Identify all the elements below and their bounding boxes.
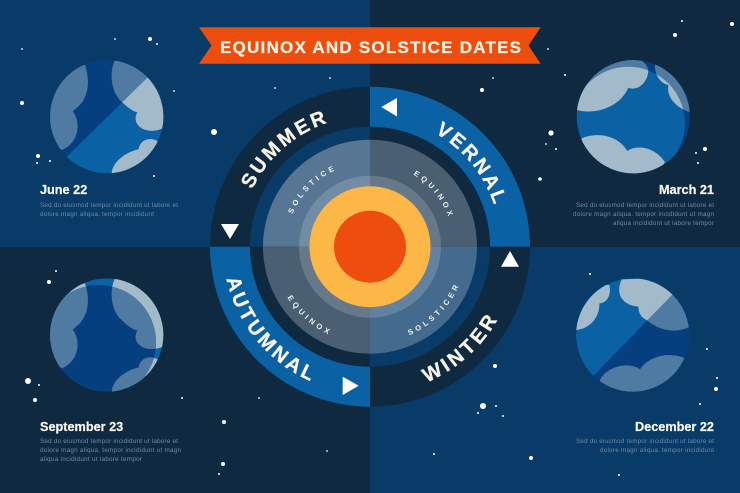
middle ring [250, 127, 490, 367]
gray inner disc [263, 140, 477, 354]
arrow: summer [221, 224, 239, 239]
label: equinox lower: EQUINOX [288, 295, 330, 334]
text block: June 22 [40, 183, 178, 218]
outer ring: winter quadrant [370, 247, 530, 407]
text block: September 23: aliqua incididunt ut labore tempor [40, 456, 142, 463]
outer ring: vernal quadrant [370, 87, 530, 247]
sun core [334, 211, 406, 283]
outer ring: autumnal quadrant [210, 247, 370, 407]
text block: September 23: September 23 [40, 420, 123, 434]
text block: March 21: March 21 [659, 183, 714, 197]
planet: December [576, 278, 690, 392]
label: autumnal: AUTUMNAL [226, 279, 311, 381]
arrow: winter [501, 251, 519, 267]
text block: June 22: Sed do eiusmod tempor incididunt ut labore et [40, 202, 178, 209]
text block: September 23: Sed do eiusmod tempor incididunt ut labore et [40, 438, 178, 445]
label: solsticer: SOLSTICER [408, 285, 458, 335]
sun outer [310, 186, 430, 307]
planet: June [50, 60, 164, 174]
planet: March [576, 60, 690, 174]
arrow: vernal [381, 98, 397, 116]
text block: March 21: Sed do eiusmod tempor incididunt ut labore et [576, 202, 714, 209]
text block: March 21 [573, 183, 714, 227]
label: winter: WINTER [420, 315, 498, 382]
text block: September 23: dolore magn aliqua. tempor incididunt ut magn [40, 447, 181, 454]
title: EQUINOX AND SOLSTICE DATES [220, 38, 521, 57]
arrow: autumnal [343, 377, 359, 395]
text block: December 22: Sed do eiusmod tempor incididunt ut labore et [576, 438, 714, 445]
text block: March 21: dolore magn aliqua. tempor incididunt ut magn [573, 211, 714, 218]
text block: March 21: aliqua incididunt ut labore tempor [613, 220, 714, 227]
outer ring: summer quadrant [210, 87, 370, 247]
text block: December 22 [576, 420, 714, 454]
text block: December 22: December 22 [635, 420, 714, 434]
label: solstice: SOLSTICE [288, 166, 334, 214]
label: summer: SUMMER [242, 112, 327, 188]
text block: September 23 [40, 420, 181, 463]
text block: June 22: June 22 [40, 183, 87, 197]
text block: June 22: dolore magn aliqua. tempor incididunt [40, 211, 154, 218]
planet: September [50, 278, 164, 392]
sun halo [299, 176, 441, 318]
central seasonal dial [210, 86, 530, 407]
label: vernal: VERNAL [439, 120, 504, 204]
title banner [199, 27, 541, 64]
label: equinox upper: EQUINOX [414, 170, 454, 216]
text block: December 22: dolore magn aliqua. tempor incididunt [600, 447, 714, 454]
